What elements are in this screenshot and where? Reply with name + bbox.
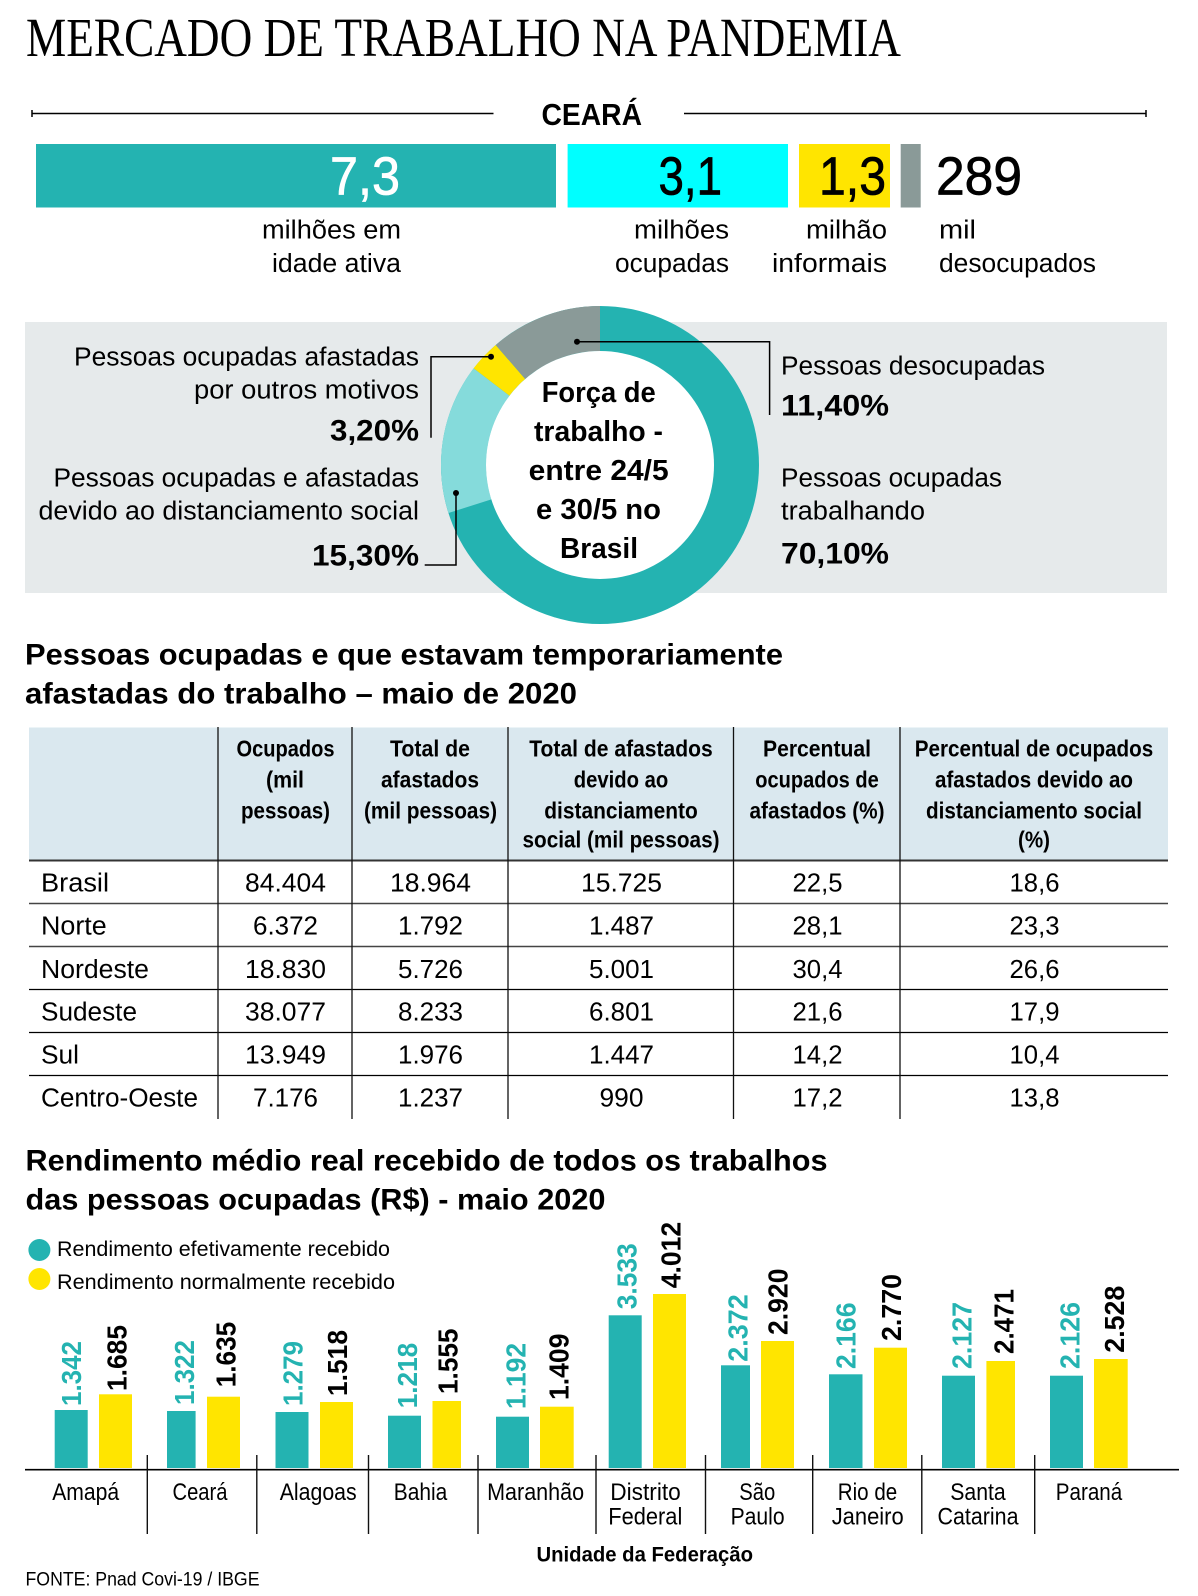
bars: Santa Catarina xyxy=(938,1289,1020,1531)
table row: Sul: 14,2 xyxy=(792,1040,842,1070)
table header: (mil pessoas) xyxy=(364,798,497,824)
donut centre text: trabalho - xyxy=(534,416,663,448)
table header: distanciamento xyxy=(544,798,698,824)
bars: Rio de Janeiro: 2.166 xyxy=(831,1302,862,1369)
donut centre text xyxy=(529,377,669,565)
bar labels: ocupadas xyxy=(615,250,729,278)
axis title: Unidade da Federação xyxy=(536,1544,753,1567)
table row: Sudeste: 38.077 xyxy=(245,997,326,1027)
bars: Ceará xyxy=(167,1322,241,1506)
bars: Ceará: Ceará xyxy=(172,1479,228,1506)
bar labels: desocupados xyxy=(939,250,1096,278)
table row: Centro-Oeste: 990 xyxy=(600,1083,644,1113)
table row: Brasil: 15.725 xyxy=(581,867,662,897)
legend xyxy=(28,1238,395,1294)
table row: Norte: Norte xyxy=(41,913,107,941)
table header: Percentual xyxy=(763,736,871,762)
bars: Maranhão: Maranhão xyxy=(487,1479,584,1506)
table row: Centro-Oeste: Centro-Oeste xyxy=(41,1085,198,1113)
donut centre text: entre 24/5 xyxy=(529,455,669,487)
heading: rendimento: das pessoas ocupadas (R$) - maio 2020 xyxy=(26,1184,606,1217)
label: distanciamento social: Pessoas ocupadas e afastadas xyxy=(54,465,419,493)
bars: Alagoas xyxy=(276,1330,357,1506)
heading: pessoas ocupadas: Pessoas ocupadas e que estavam temporariamente xyxy=(25,639,783,672)
table header xyxy=(236,736,1153,853)
bars: Paraná: Paraná xyxy=(1056,1479,1123,1506)
table header: afastados xyxy=(381,767,479,793)
bars: Distrito Federal: Federal xyxy=(608,1504,682,1531)
bars: Bahia xyxy=(388,1328,464,1506)
bars: Santa Catarina: 2.127 xyxy=(946,1302,978,1369)
table row: Sudeste: 8.233 xyxy=(398,997,463,1027)
table row: Nordeste: 5.726 xyxy=(398,954,463,984)
bars: Amapá: 1.685 xyxy=(101,1325,132,1391)
heading: rendimento: Rendimento médio real recebido de todos os trabalhos xyxy=(26,1145,828,1178)
table header: Total de xyxy=(390,736,470,762)
bar: ocupadas: 3,1 xyxy=(658,146,722,206)
bars: Paraná: 2.126 xyxy=(1054,1302,1085,1369)
bars: Santa Catarina: 2.471 xyxy=(989,1289,1020,1354)
stacked bars: Ceará xyxy=(36,144,1022,208)
bars: Bahia: 1.218 xyxy=(392,1343,423,1408)
table row: Nordeste: 5.001 xyxy=(589,954,654,984)
donut centre text: Força de xyxy=(542,377,656,409)
table row: Centro-Oeste xyxy=(41,1083,1060,1113)
bar: desocupados xyxy=(901,144,1022,208)
table row: Nordeste: 30,4 xyxy=(792,954,842,984)
label: outros motivos: Pessoas ocupadas afastadas xyxy=(74,344,419,372)
label: desocupadas xyxy=(781,353,1045,423)
label: trabalhando: 70,10% xyxy=(781,538,889,571)
bar labels xyxy=(262,217,1096,278)
bars: Ceará: 1.322 xyxy=(169,1340,200,1405)
table row: Brasil: 18.964 xyxy=(390,867,471,897)
table row: Sul xyxy=(41,1040,1060,1070)
donut centre text: Brasil xyxy=(560,533,638,565)
bars: Santa Catarina: Catarina xyxy=(938,1504,1019,1531)
bar: desocupados: 289 xyxy=(936,146,1022,206)
bar labels: milhões em xyxy=(262,217,401,245)
bar labels: milhão xyxy=(806,217,887,245)
heading: pessoas ocupadas: afastadas do trabalho – maio de 2020 xyxy=(25,677,577,710)
bars: Santa Catarina: Santa xyxy=(950,1479,1006,1506)
table row: Centro-Oeste: 13,8 xyxy=(1010,1083,1060,1113)
donut chart xyxy=(441,306,759,624)
table row: Sudeste: 17,9 xyxy=(1010,997,1060,1027)
bars: São Paulo: Paulo xyxy=(731,1504,785,1531)
table header: ocupados de xyxy=(755,767,879,793)
bars: Amapá xyxy=(52,1325,132,1506)
bars: São Paulo: São xyxy=(739,1479,775,1506)
bars: Distrito Federal: 3.533 xyxy=(611,1243,642,1309)
table header: social (mil pessoas) xyxy=(522,827,720,853)
bars: Distrito Federal: Distrito xyxy=(610,1479,681,1506)
table row: Norte xyxy=(41,911,1060,941)
table xyxy=(29,727,1168,1119)
table header: afastados (%) xyxy=(750,798,884,824)
bars: Bahia: Bahia xyxy=(394,1479,448,1506)
table row: Nordeste: 18.830 xyxy=(245,954,326,984)
table row: Centro-Oeste: 1.237 xyxy=(398,1083,463,1113)
bars: Alagoas: Alagoas xyxy=(280,1479,357,1506)
table row: Brasil: 18,6 xyxy=(1010,867,1060,897)
table row: Nordeste xyxy=(41,954,1060,984)
label: desocupadas: 11,40% xyxy=(781,390,889,423)
bars: Maranhão xyxy=(487,1334,584,1506)
bars: Paraná: 2.528 xyxy=(1099,1286,1130,1353)
bars: Rio de Janeiro xyxy=(829,1274,907,1531)
label: distanciamento social xyxy=(38,465,419,573)
bars: Alagoas: 1.279 xyxy=(277,1341,308,1406)
table row: Sul: Sul xyxy=(41,1042,79,1070)
table row: Nordeste: 26,6 xyxy=(1010,954,1060,984)
table row: Sul: 13.949 xyxy=(245,1040,326,1070)
table header: Percentual de ocupados xyxy=(915,736,1153,762)
bar: ocupadas xyxy=(568,144,788,208)
title: MERCADO DE TRABALHO NA PANDEMIA xyxy=(26,7,901,68)
label: trabalhando: trabalhando xyxy=(781,498,925,526)
table row: Brasil: Brasil xyxy=(41,869,109,897)
bar labels: milhões xyxy=(634,217,729,245)
label: trabalhando: Pessoas ocupadas xyxy=(781,465,1002,493)
bars: Amapá: 1.342 xyxy=(56,1341,87,1406)
table row: Brasil: 22,5 xyxy=(792,867,842,897)
bars: Rio de Janeiro: Janeiro xyxy=(832,1504,904,1531)
bars: Maranhão: 1.409 xyxy=(543,1334,574,1400)
table row: Norte: 1.792 xyxy=(398,911,463,941)
table row: Sudeste xyxy=(41,997,1060,1027)
legend: Rendimento efetivamente recebido xyxy=(57,1238,390,1261)
bars: Distrito Federal: 4.012 xyxy=(656,1222,687,1288)
table row: Sudeste: Sudeste xyxy=(41,999,137,1027)
donut centre text: e 30/5 no xyxy=(536,494,661,526)
section heading: Ceará: CEARÁ xyxy=(542,97,642,132)
bars: Alagoas: 1.518 xyxy=(322,1330,353,1396)
table row: Sul: 1.447 xyxy=(589,1040,654,1070)
table header: Total de afastados xyxy=(529,736,713,762)
label: outros motivos: por outros motivos xyxy=(194,377,419,405)
source: FONTE: Pnad Covi-19 / IBGE xyxy=(26,1570,260,1591)
label: distanciamento social: devido ao distanciamento social xyxy=(38,498,419,526)
panel: força de trabalho xyxy=(25,306,1167,624)
table row: Sul: 1.976 xyxy=(398,1040,463,1070)
bars: Rio de Janeiro: 2.770 xyxy=(876,1274,907,1341)
bars: Maranhão: 1.192 xyxy=(500,1343,531,1409)
bar labels: mil xyxy=(939,217,976,245)
table row: Sudeste: 21,6 xyxy=(792,997,842,1027)
bars: Ceará: 1.635 xyxy=(210,1322,241,1387)
table row: Brasil xyxy=(41,867,1060,897)
table header: afastados devido ao xyxy=(935,767,1133,793)
heading: rendimento xyxy=(26,1145,828,1217)
bars: São Paulo: 2.372 xyxy=(722,1294,753,1362)
bar: idade ativa: 7,3 xyxy=(330,146,400,206)
section heading: Ceará xyxy=(32,97,1146,132)
table row: Nordeste: Nordeste xyxy=(41,956,149,984)
table row: Sul: 10,4 xyxy=(1010,1040,1060,1070)
bars: Distrito Federal xyxy=(608,1222,687,1531)
bars: Bahia: 1.555 xyxy=(433,1328,464,1394)
bars: São Paulo: 2.920 xyxy=(762,1268,793,1335)
table header: (%) xyxy=(1018,827,1050,853)
legend: Rendimento normalmente recebido xyxy=(57,1271,395,1294)
bar labels: informais xyxy=(772,250,887,278)
bars: Rio de Janeiro: Rio de xyxy=(838,1479,897,1506)
table row: Norte: 1.487 xyxy=(589,911,654,941)
table header: pessoas) xyxy=(241,798,330,824)
label: distanciamento social: 15,30% xyxy=(312,540,419,573)
label: desocupadas: Pessoas desocupadas xyxy=(781,353,1045,381)
table row: Centro-Oeste: 7.176 xyxy=(253,1083,318,1113)
table row: Sudeste: 6.801 xyxy=(589,997,654,1027)
table row: Norte: 6.372 xyxy=(253,911,318,941)
bar labels: idade ativa xyxy=(272,250,402,278)
label: outros motivos: 3,20% xyxy=(330,415,419,448)
bar chart: rendimento xyxy=(25,1222,1179,1534)
bars: Amapá: Amapá xyxy=(52,1479,120,1506)
bars: Paraná xyxy=(1050,1286,1130,1506)
bars: São Paulo xyxy=(721,1268,794,1531)
table row: Centro-Oeste: 17,2 xyxy=(792,1083,842,1113)
bar: idade ativa xyxy=(36,144,556,208)
table header: devido ao xyxy=(574,767,668,793)
table header: Ocupados xyxy=(236,736,334,762)
label: outros motivos xyxy=(74,344,419,448)
table row: Norte: 23,3 xyxy=(1010,911,1060,941)
table header: distanciamento social xyxy=(926,798,1142,824)
table row: Brasil: 84.404 xyxy=(245,867,326,897)
leader lines xyxy=(425,339,770,565)
label: trabalhando xyxy=(781,465,1002,571)
heading: pessoas ocupadas xyxy=(25,639,783,710)
table row: Norte: 28,1 xyxy=(792,911,842,941)
bar: informais: 1,3 xyxy=(819,146,886,206)
table header: (mil xyxy=(266,767,304,793)
